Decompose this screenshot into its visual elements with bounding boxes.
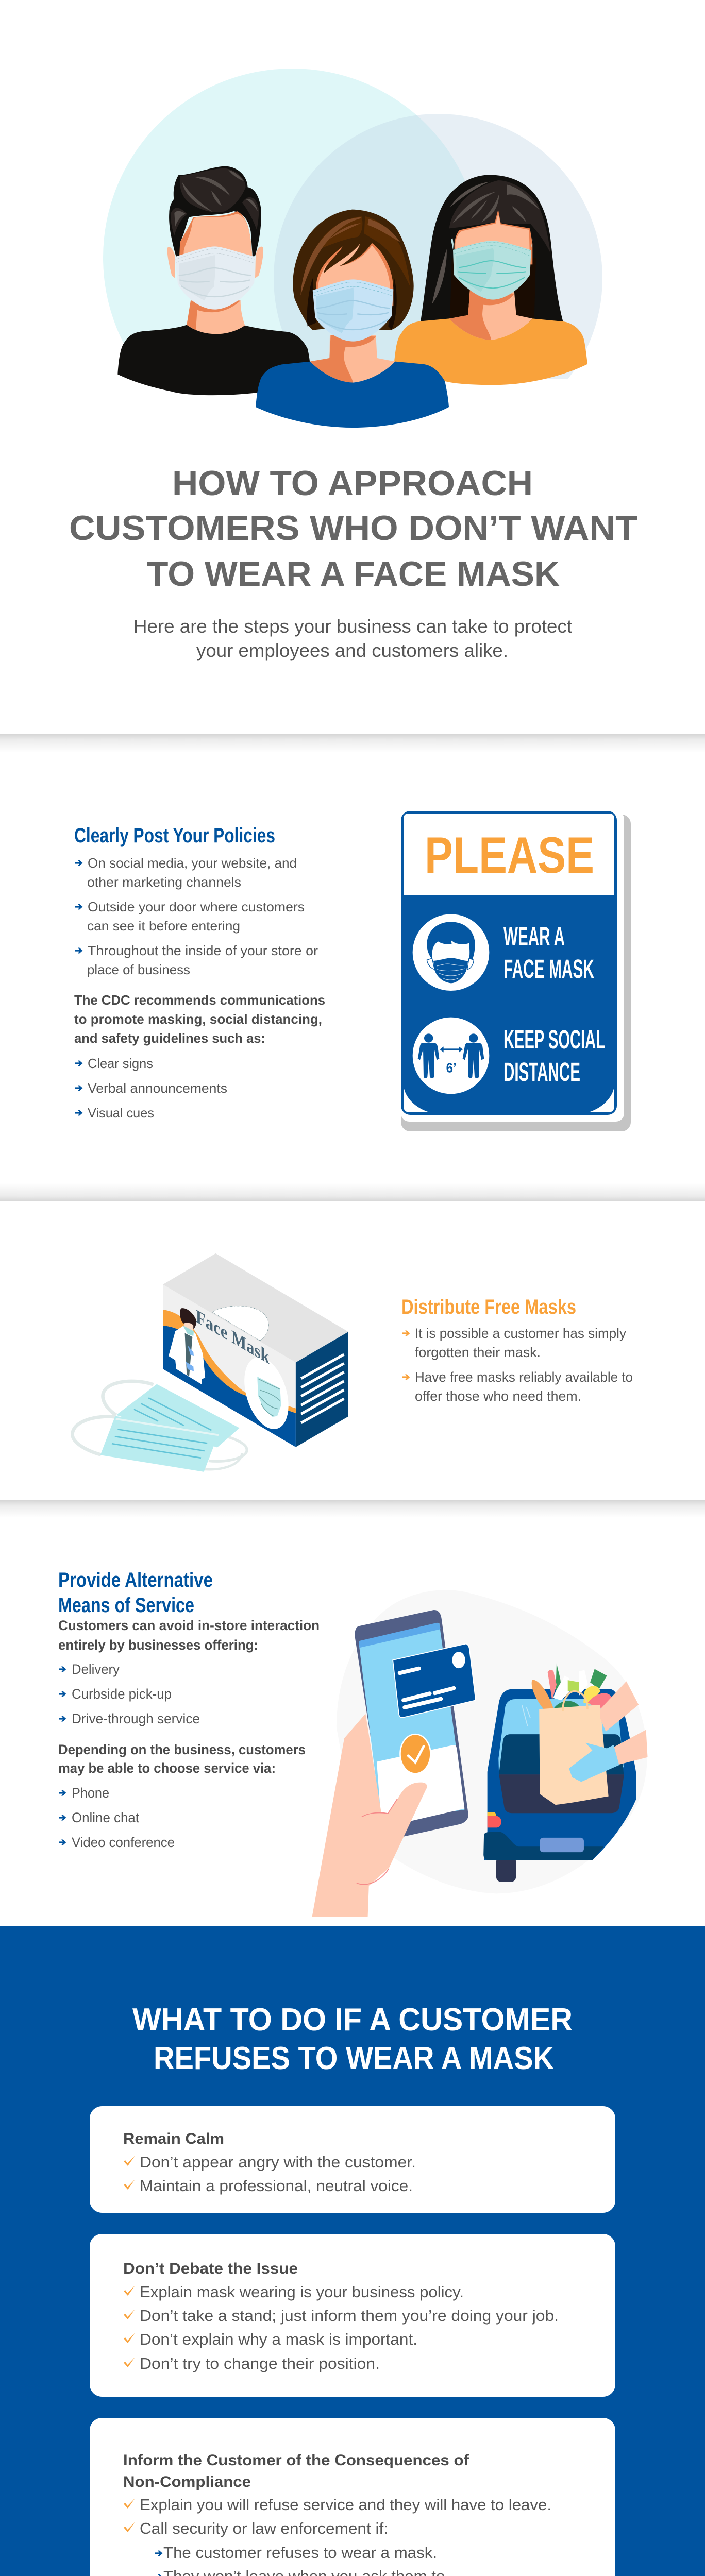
- phone: [355, 1610, 476, 1837]
- bullet list: channels: place of business: [87, 962, 190, 977]
- card: inform the customer of the consequences: Explain you will refuse service and they will have to leave.: [140, 2496, 551, 2514]
- bullet list: guidelines: Clear signs: [88, 1056, 153, 1071]
- bullet list: contact channels: Video conference: [72, 1835, 175, 1850]
- box: Face Mask: [196, 1305, 270, 1368]
- lead text: Customers can avoid in-store interaction: [58, 1618, 320, 1633]
- person: woman in blue shirt: [256, 210, 449, 428]
- second lead text: may be able to choose service via:: [58, 1760, 276, 1776]
- card: don't debate the issue: [90, 2234, 615, 2397]
- card: don't debate the issue: Don’t try to change their position.: [140, 2354, 380, 2372]
- illustration: phone order and curbside delivery: [312, 1590, 648, 1917]
- bullet list: channels: On social media, your website, and: [88, 855, 297, 871]
- bullet list: offer those who need them.: [415, 1388, 581, 1404]
- title: CUSTOMERS WHO DON’T WANT: [69, 509, 637, 548]
- lead text: entirely by businesses offering:: [58, 1637, 258, 1653]
- bullet list: channels: can see it before entering: [87, 918, 240, 934]
- bullet list: channels: Outside your door where customers: [88, 899, 305, 914]
- illustration: face mask box: [72, 1253, 348, 1472]
- CDC recommendation text: [74, 992, 325, 1046]
- loose masks: [72, 1381, 247, 1472]
- second lead text: [58, 1742, 306, 1776]
- hero illustration: three people wearing masks: [103, 69, 602, 447]
- panel: provide alternative means of service: [58, 1569, 648, 1917]
- bullet list: contact channels: Online chat: [72, 1810, 139, 1825]
- bullet list: guidelines: Visual cues: [88, 1105, 154, 1121]
- panel: distribute free masks: [0, 1253, 705, 1518]
- icon: face with mask: [413, 914, 489, 991]
- card: don't debate the issue: Don’t explain why a mask is important.: [140, 2330, 417, 2348]
- title: HOW TO APPROACH: [172, 464, 533, 503]
- bullet list: contact channels: Phone: [72, 1785, 109, 1801]
- heading: Provide Alternative: [58, 1569, 213, 1591]
- sign wording: WEAR A: [503, 922, 565, 951]
- card: remain calm: [90, 2106, 615, 2213]
- intro text: Here are the steps your business can take to protect: [133, 616, 572, 637]
- icon: keep social distance: 6’: [446, 1060, 457, 1076]
- bullet list: guidelines: Verbal announcements: [88, 1080, 227, 1096]
- sign wording: [503, 922, 605, 1087]
- person: woman in orange shirt: [394, 175, 588, 385]
- card: remain calm: Maintain a professional, neutral voice.: [140, 2177, 413, 2195]
- grocery bag: [532, 1662, 612, 1805]
- heading: Distribute Free Masks: [401, 1296, 576, 1318]
- intro text: [133, 616, 572, 661]
- sign: please wear a face mask: [401, 811, 631, 1131]
- title: TO WEAR A FACE MASK: [147, 554, 560, 594]
- arms and glove: [569, 1681, 648, 1782]
- card: don't debate the issue: Don’t take a stand; just inform them you’re doing your job.: [140, 2307, 559, 2325]
- bullet list: channels: other marketing channels: [87, 874, 241, 890]
- sign wording: FACE MASK: [503, 954, 594, 984]
- hand: [312, 1714, 427, 1917]
- second lead text: Depending on the business, customers: [58, 1742, 306, 1757]
- background circles: [103, 69, 602, 379]
- heading: REFUSES TO WEAR A MASK: [154, 2041, 554, 2076]
- bullet list: contact channels: [59, 1785, 175, 1850]
- icon: keep social distance: [413, 1018, 489, 1094]
- bullet list: services: Curbside pick-up: [72, 1686, 172, 1702]
- heading: [132, 2002, 573, 2076]
- panel: clearly post your policies: [0, 734, 705, 1201]
- panel: what to do if a customer refuses: [0, 1926, 705, 2576]
- bullet list: services: Delivery: [72, 1662, 120, 1677]
- heading: Clearly Post Your Policies: [74, 824, 275, 847]
- CDC recommendation text: to promote masking, social distancing,: [74, 1011, 322, 1027]
- bullet list: guidelines: [75, 1056, 227, 1121]
- card: inform the customer of the consequences: Inform the Customer of the Consequences of: [123, 2452, 469, 2469]
- title: [69, 464, 637, 594]
- card: inform the customer of the consequences: Call security or law enforcement if:: [140, 2519, 388, 2537]
- sign: please wear a face mask: PLEASE: [425, 826, 594, 884]
- lead text: [58, 1618, 320, 1653]
- bullet list: It is possible a customer has simply: [415, 1326, 626, 1341]
- heading: WHAT TO DO IF A CUSTOMER: [132, 2002, 573, 2038]
- card: don't debate the issue: Don’t Debate the Issue: [123, 2260, 298, 2277]
- card: inform the customer of the consequences: Non-Compliance: [123, 2473, 251, 2490]
- doctor on box: [169, 1308, 205, 1384]
- bullet list: [402, 1326, 633, 1404]
- CDC recommendation text: and safety guidelines such as:: [74, 1030, 265, 1046]
- bullet list: services: Drive-through service: [72, 1711, 200, 1726]
- heading: Means of Service: [58, 1594, 194, 1617]
- card: inform the customer of the consequences: [90, 2418, 615, 2576]
- box: [163, 1253, 348, 1447]
- bullet list: Have free masks reliably available to: [415, 1369, 633, 1385]
- sign wording: DISTANCE: [503, 1057, 580, 1087]
- card: inform the customer of the consequences: The customer refuses to wear a mask.: [163, 2544, 437, 2562]
- card: don't debate the issue: Explain mask wearing is your business policy.: [140, 2283, 464, 2301]
- CDC recommendation text: The CDC recommends communications: [74, 992, 325, 1008]
- bullet list: channels: [75, 855, 318, 977]
- bullet list: forgotten their mask.: [415, 1345, 541, 1360]
- heading: [58, 1569, 213, 1617]
- intro text: your employees and customers alike.: [196, 640, 508, 661]
- card: remain calm: Remain Calm: [123, 2130, 224, 2147]
- vehicle: [483, 1689, 636, 1882]
- sign wording: KEEP SOCIAL: [503, 1025, 605, 1054]
- bullet list: channels: Throughout the inside of your store or: [88, 943, 318, 958]
- bullet list: services: [59, 1662, 200, 1726]
- person: man in black shirt: [118, 166, 311, 395]
- card: remain calm: Don’t appear angry with the customer.: [140, 2153, 416, 2171]
